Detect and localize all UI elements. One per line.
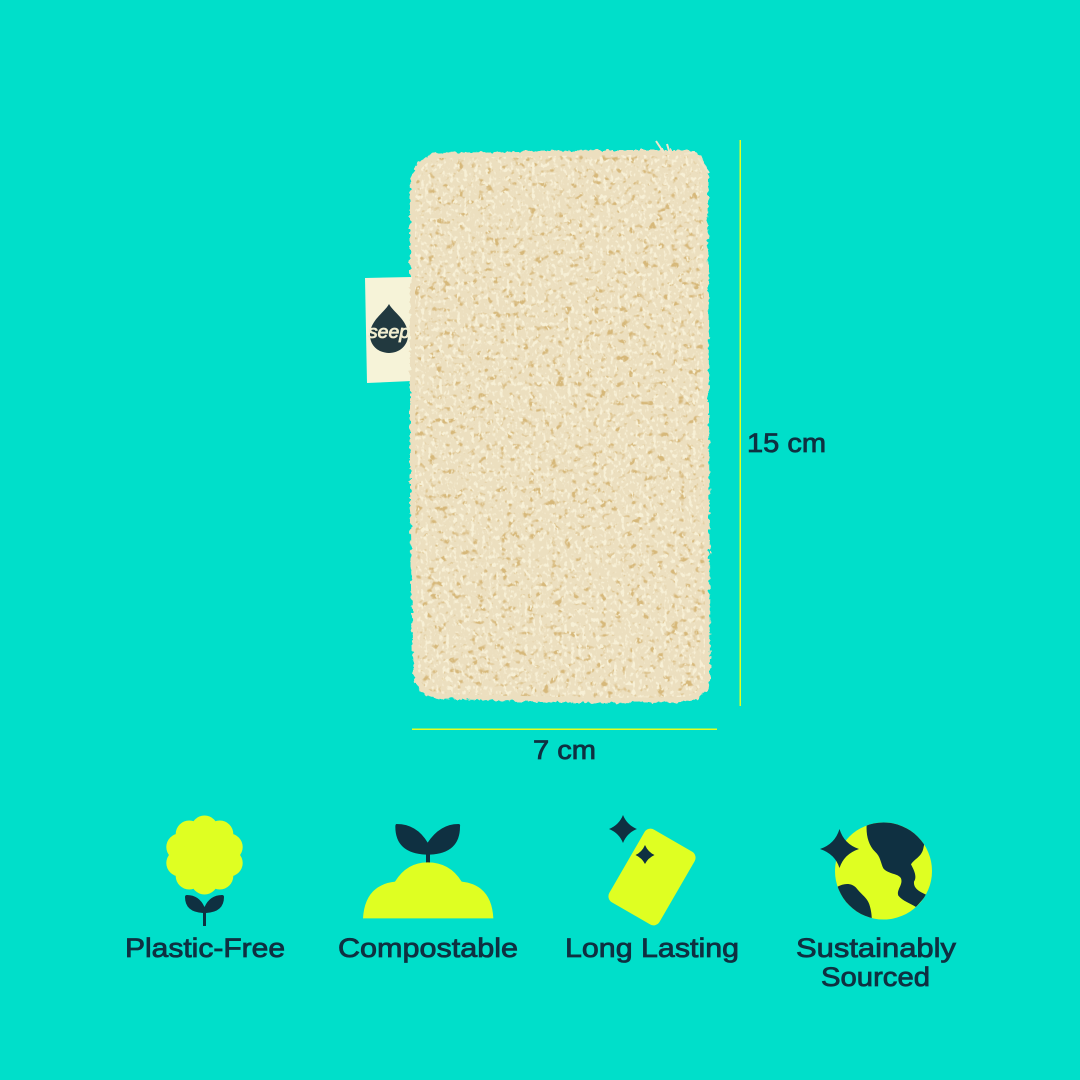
height label: 15 cm bbox=[747, 428, 826, 458]
label: sustainably sourced bbox=[796, 933, 957, 992]
logo drop bbox=[370, 304, 408, 353]
logo wordmark: seep bbox=[368, 322, 410, 342]
icon: flower (plastic-free) bbox=[166, 816, 243, 926]
icon: sparkling card (long lasting) bbox=[606, 815, 698, 928]
icon: sprout on soil (compostable) bbox=[363, 824, 493, 918]
height dimension line bbox=[740, 140, 741, 706]
loofah sponge bbox=[410, 141, 710, 703]
icon: globe with sparkle (sustainably sourced) bbox=[820, 818, 932, 922]
label: plastic-free: Plastic-Free bbox=[125, 933, 285, 963]
label: sustainably sourced: Sourced bbox=[821, 962, 930, 992]
width dimension line bbox=[412, 728, 717, 730]
label: sustainably sourced: Sustainably bbox=[796, 933, 957, 963]
label: long lasting: Long Lasting bbox=[565, 933, 739, 963]
product tag with seep logo bbox=[365, 277, 412, 383]
width label: 7 cm bbox=[533, 735, 596, 765]
label: compostable: Compostable bbox=[338, 933, 518, 963]
